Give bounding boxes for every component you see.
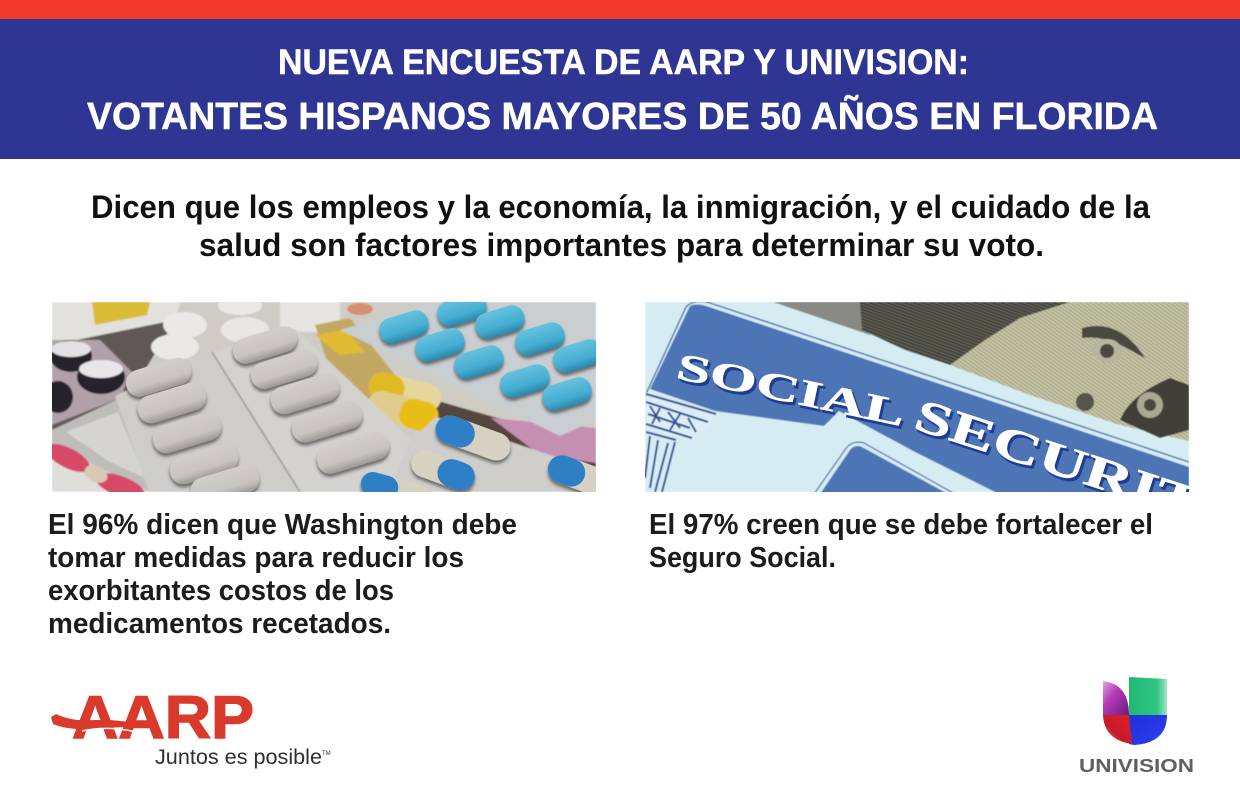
logo: Univision	[1079, 677, 1194, 776]
word: social: SOCIAL	[675, 349, 911, 438]
text: social security	[649, 509, 1153, 574]
logo: AARP	[51, 684, 331, 769]
photo: medicine blister packs	[52, 302, 596, 492]
header banner	[0, 19, 1240, 159]
logo: AARP: AARP	[72, 684, 254, 751]
subtitle	[91, 189, 1150, 263]
title line 2: VOTANTES HISPANOS MAYORES DE 50 AÑOS EN FLORIDA	[87, 94, 1158, 138]
word: security: SECURITY	[909, 389, 1240, 544]
text: prescription drug costs: El 96% dicen que Washington debe	[48, 509, 517, 541]
logo: AARP: Juntos es posible	[155, 746, 322, 769]
top red stripe	[0, 0, 1240, 19]
logo: AARP: TM	[322, 751, 331, 757]
text: social security: El 97% creen que se debe fortalecer el	[649, 509, 1153, 541]
word: social: SOCIAL	[673, 346, 909, 435]
text: prescription drug costs	[48, 509, 517, 640]
blue and white capsules	[358, 416, 596, 492]
text: prescription drug costs: medicamentos recetados.	[48, 608, 391, 640]
subtitle: salud son factores importantes para determinar su voto.	[199, 227, 1044, 263]
text: prescription drug costs: exorbitantes costos de los	[48, 575, 394, 607]
card lettering	[678, 356, 1189, 492]
blue tablets	[377, 302, 596, 416]
photo: social security card and dollar bill	[645, 302, 1189, 492]
text: social security: Seguro Social.	[649, 542, 836, 574]
white tablets	[124, 326, 392, 492]
word: security: SECURITY	[911, 392, 1240, 547]
word: social	[678, 356, 904, 430]
subtitle: Dicen que los empleos y la economía, la inmigración, y el cuidado de la	[91, 189, 1150, 225]
text: prescription drug costs: tomar medidas para reducir los	[48, 542, 464, 574]
title line 1: NUEVA ENCUESTA DE AARP Y UNIVISION:	[278, 43, 969, 82]
logo: Univision: UNIVISION	[1079, 756, 1194, 776]
word: security	[915, 402, 1189, 492]
